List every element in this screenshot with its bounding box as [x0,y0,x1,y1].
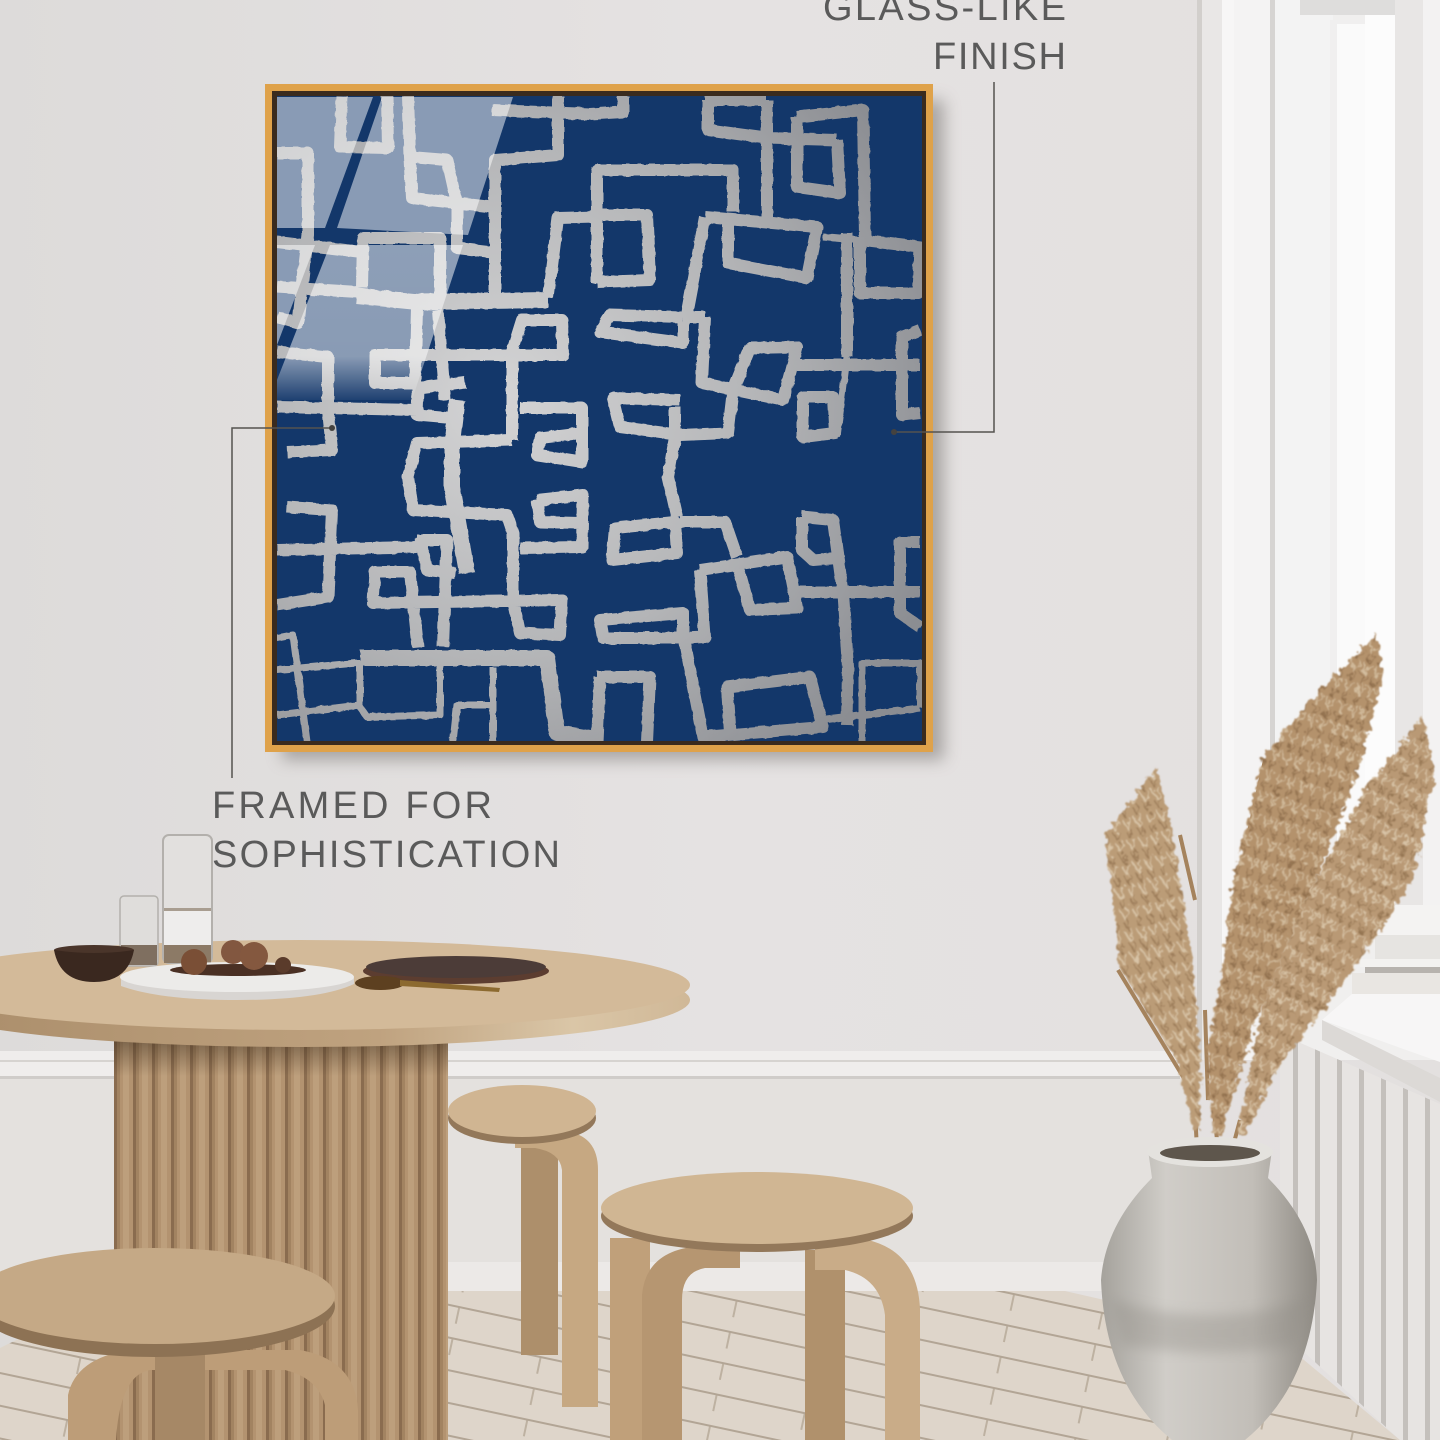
callout: glass-like finish [823,0,1066,435]
floor [0,1291,1400,1440]
dark bowl [54,945,134,982]
navy canvas [277,96,922,741]
ceramic vase [1101,1137,1317,1440]
fluted table base [114,1030,448,1440]
glass reflection [277,97,513,400]
front left stool [0,1248,358,1440]
window sill [1322,994,1440,1102]
marble plate with nuts [120,940,354,1000]
stems and stray sprigs [1118,760,1265,1150]
glass carafe [120,835,212,966]
silver pattern [277,96,920,742]
callout: framed for sophistication: SOPHISTICATION [212,834,560,876]
plume right [1238,717,1435,1135]
window frame [1197,0,1440,1060]
gold frame [265,84,933,752]
plume centre [1207,634,1383,1135]
wooden plate and spoon [355,956,549,992]
callout: glass-like finish: FINISH [933,36,1066,78]
front right stool [601,1172,920,1440]
radiator [1280,1034,1440,1440]
plume left [1105,767,1200,1130]
table top with tableware [0,835,690,1047]
callout: framed for sophistication: FRAMED FOR [212,785,492,827]
frame shadow [282,100,944,760]
callout: framed for sophistication [212,425,560,876]
back stool [448,1085,598,1407]
wainscot panel and chair rail [0,1051,1200,1291]
books on window sill [1345,905,1440,995]
pampas grass [1105,634,1435,1150]
framed artwork [265,84,944,760]
